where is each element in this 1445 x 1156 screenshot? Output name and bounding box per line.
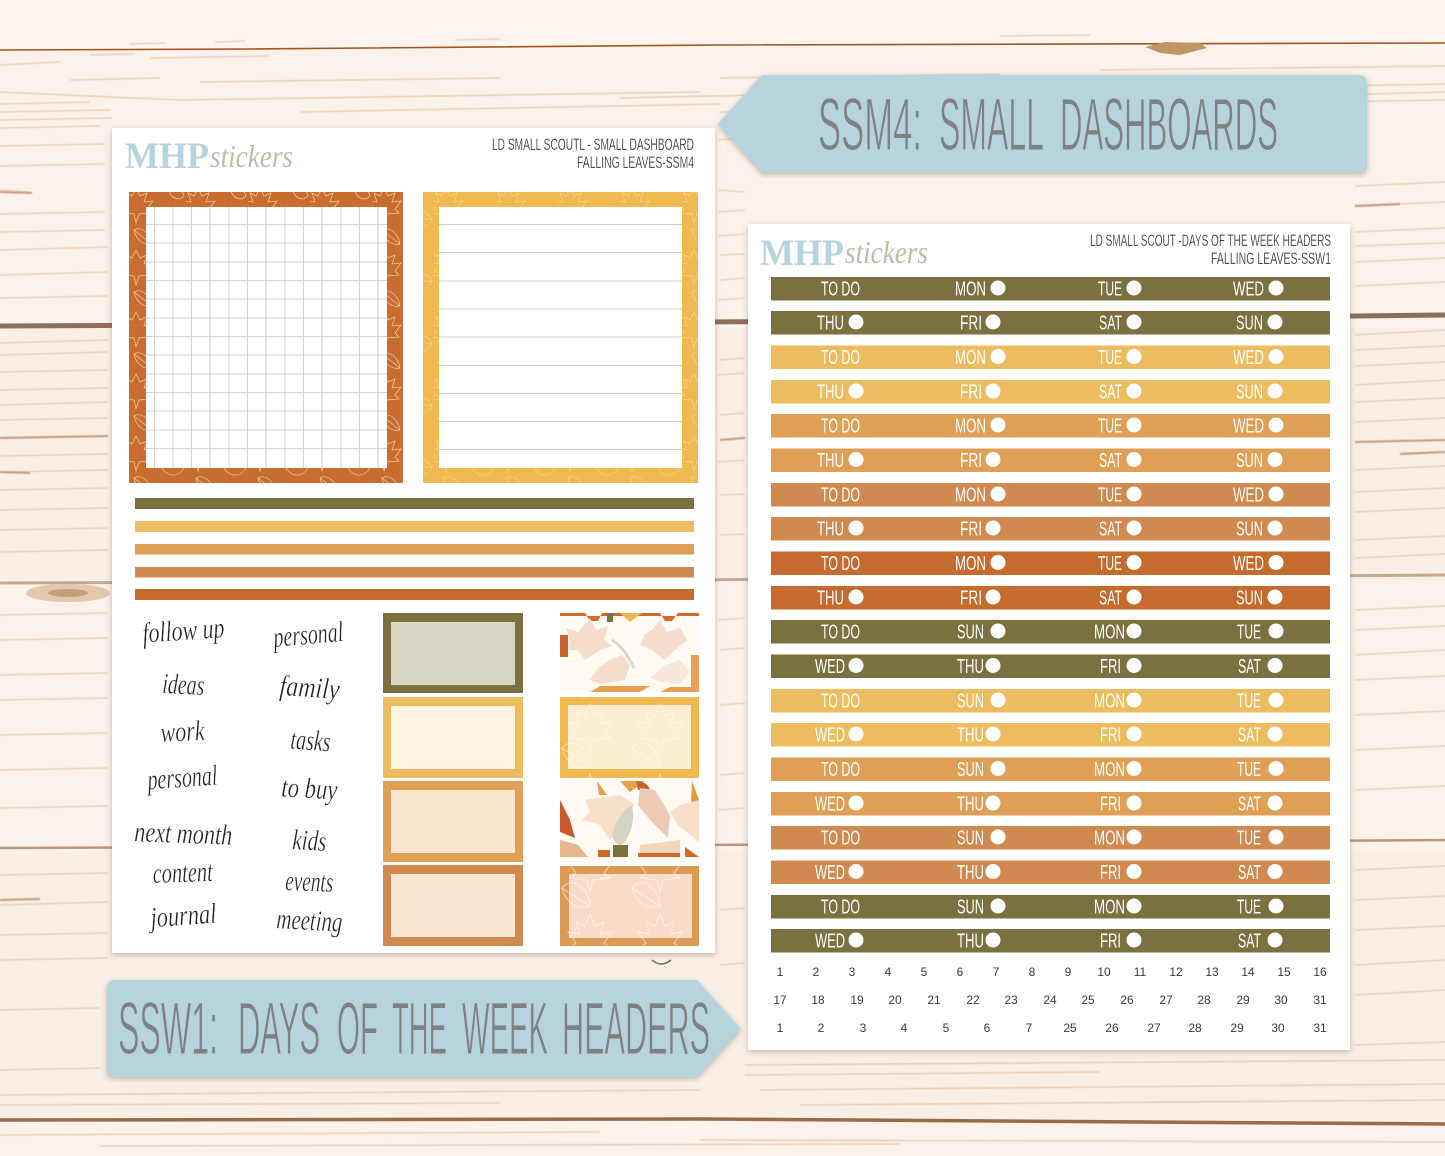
header strip row 12: FRI: [1100, 656, 1121, 678]
logo: MHP stickers: MHP: [125, 136, 209, 177]
header strip row 9: MON: [955, 553, 986, 575]
patterned leaf sticker: peach frame: [560, 866, 699, 946]
banner: SSM4 small dashboards: SSM4:: [818, 83, 922, 166]
patterned leaf sticker: peach collage: [560, 613, 699, 692]
banner: SSW1 days of the week headers: HEADERS: [562, 987, 710, 1070]
date numbers row 3: 31: [1313, 1021, 1327, 1035]
date numbers row 2: 24: [1043, 993, 1057, 1007]
date numbers row 1: 9: [1065, 965, 1072, 979]
date numbers row 1: 12: [1169, 965, 1183, 979]
header strip row 19: SUN: [957, 896, 984, 918]
header strip row 11: TUE: [1237, 622, 1261, 644]
header strip row 12: WED: [815, 656, 845, 678]
date numbers row 1: 16: [1313, 965, 1327, 979]
banner: SSM4 small dashboards: [718, 75, 1367, 173]
colour stripes: [135, 498, 694, 600]
banner: SSW1 days of the week headers: OF: [337, 987, 378, 1070]
header strip row 20: [771, 929, 1330, 952]
header strip row 6: FRI: [960, 450, 982, 472]
date numbers row 2: 18: [811, 993, 825, 1007]
header strip row 14: SAT: [1238, 724, 1261, 746]
header strip row 9: TUE: [1098, 553, 1122, 575]
header strip row 8: FRI: [960, 518, 982, 540]
handwritten word stickers: next month: [134, 816, 233, 852]
header strip row 16: [771, 792, 1330, 816]
header strip row 13: TUE: [1237, 690, 1261, 712]
header strip row 3: TUE: [1098, 347, 1122, 369]
date numbers row 2: 21: [927, 993, 941, 1007]
date numbers row 2: 27: [1159, 993, 1173, 1007]
date numbers row 2: 19: [850, 993, 864, 1007]
header strip row 19: TUE: [1237, 896, 1261, 918]
header strip row 11: [771, 620, 1330, 644]
date numbers row 1: 8: [1029, 965, 1036, 979]
header strip row 2: FRI: [960, 312, 982, 334]
header strip row 9: TO DO: [821, 553, 860, 575]
header strip row 17: [771, 826, 1330, 850]
date numbers row 2: 30: [1274, 993, 1288, 1007]
header strip row 1: MON: [955, 278, 986, 300]
handwritten word stickers: follow up: [141, 612, 225, 650]
header strip row 15: SUN: [957, 759, 984, 781]
date numbers row 1: 3: [849, 965, 856, 979]
date numbers row 3: [777, 1021, 1327, 1035]
date numbers row 2: 23: [1004, 993, 1018, 1007]
date numbers row 3: 26: [1105, 1021, 1119, 1035]
header strip row 10: SUN: [1236, 588, 1263, 610]
date numbers row 1: 6: [957, 965, 964, 979]
header strip row 10: SAT: [1099, 588, 1122, 610]
panel: yellow lined sticker: [423, 192, 698, 483]
handwritten word stickers: journal: [146, 898, 217, 935]
header strip row 7: [771, 483, 1330, 506]
date numbers row 3: 1: [777, 1021, 784, 1035]
header strip row 5: MON: [955, 416, 986, 438]
header strip row 4: FRI: [960, 382, 982, 404]
header strip row 3: TO DO: [821, 347, 860, 369]
header strip row 3: MON: [955, 347, 986, 369]
header strip row 2: SUN: [1236, 312, 1263, 334]
header strip row 7: TO DO: [821, 484, 860, 506]
logo: MHP stickers: stickers: [210, 138, 293, 174]
header strip row 5: TUE: [1098, 416, 1122, 438]
handwritten word stickers: events: [285, 865, 334, 899]
date numbers row 2: 26: [1120, 993, 1134, 1007]
header strip row 17: TUE: [1237, 828, 1261, 850]
header strip row 3: WED: [1233, 347, 1264, 369]
header strip row 20: FRI: [1100, 930, 1121, 952]
logo: MHP stickers: MHP: [760, 233, 844, 274]
date numbers row 2: 25: [1081, 993, 1095, 1007]
header strip row 20: WED: [815, 930, 845, 952]
header strip row 1: WED: [1233, 278, 1264, 300]
header strip row 7: TUE: [1098, 484, 1122, 506]
header strip row 15: [771, 758, 1330, 781]
header strip row 11: TO DO: [821, 622, 860, 644]
date numbers row 1: 5: [921, 965, 928, 979]
date numbers row 1: 7: [993, 965, 1000, 979]
header strip row 6: SAT: [1099, 450, 1122, 472]
header strip row 6: SUN: [1236, 450, 1263, 472]
date numbers row 3: 7: [1026, 1021, 1033, 1035]
header strip row 15: MON: [1094, 759, 1125, 781]
date numbers row 3: 28: [1188, 1021, 1202, 1035]
header strip row 10: THU: [817, 588, 844, 610]
date numbers row 1: 15: [1277, 965, 1291, 979]
header strip row 17: SUN: [957, 828, 984, 850]
date numbers row 1: 1: [777, 965, 784, 979]
header strip row 5: TO DO: [821, 416, 860, 438]
date numbers row 3: 27: [1147, 1021, 1161, 1035]
header strip row 12: [771, 654, 1330, 678]
logo: MHP stickers: stickers: [845, 234, 928, 270]
date numbers row 2: 31: [1313, 993, 1327, 1007]
header strip row 19: [771, 895, 1330, 918]
header strip row 16: THU: [957, 794, 984, 816]
banner: SSW1 days of the week headers: SSW1:: [118, 987, 218, 1070]
header strip row 1: TUE: [1098, 278, 1122, 300]
header strip row 4: SAT: [1099, 382, 1122, 404]
header strip row 13: TO DO: [821, 690, 860, 712]
header strip row 18: [771, 860, 1330, 884]
header strip row 14: [771, 723, 1330, 746]
header strip row 16: WED: [815, 794, 845, 816]
banner: SSW1 days of the week headers: [107, 980, 741, 1077]
header strip row 8: SUN: [1236, 518, 1263, 540]
handwritten word stickers: ideas: [162, 668, 205, 702]
patterned leaf sticker: orange collage: [560, 781, 699, 862]
header strip row 12: SAT: [1238, 656, 1261, 678]
date numbers row 2: 29: [1236, 993, 1250, 1007]
date numbers row 2: 20: [888, 993, 902, 1007]
date numbers row 3: 3: [860, 1021, 867, 1035]
handwritten word stickers: to buy: [281, 772, 338, 806]
patterned leaf sticker: yellow frame: [560, 697, 699, 778]
date numbers row 1: 4: [885, 965, 892, 979]
sheet title: FALLING LEAVES-SSW1: [1211, 249, 1331, 268]
header strip row 17: TO DO: [821, 828, 860, 850]
date numbers row 1: 13: [1205, 965, 1219, 979]
date numbers row 2: 28: [1197, 993, 1211, 1007]
header strip row 18: WED: [815, 862, 845, 884]
date numbers row 1: 2: [813, 965, 820, 979]
date numbers row 1: 11: [1134, 965, 1147, 979]
header strip row 9: [771, 552, 1330, 575]
date numbers row 2: [773, 993, 1327, 1007]
panel: orange grid sticker: [129, 192, 403, 483]
date numbers row 1: 10: [1097, 965, 1111, 979]
header strip row 1: TO DO: [821, 278, 860, 300]
date numbers row 2: 22: [966, 993, 980, 1007]
header strip row 11: SUN: [957, 622, 984, 644]
banner: SSM4 small dashboards: SMALL: [939, 83, 1044, 166]
date numbers row 3: 4: [901, 1021, 908, 1035]
header strip row 14: WED: [815, 724, 845, 746]
banner: SSW1 days of the week headers: THE: [392, 987, 447, 1070]
header strip row 13: [771, 689, 1330, 712]
sheet title: FALLING LEAVES-SSM4: [577, 153, 694, 172]
panel: small dashboard sticker sheet: [112, 128, 715, 953]
date numbers row 3: 2: [818, 1021, 825, 1035]
date numbers row 3: 5: [943, 1021, 950, 1035]
header strip row 5: [771, 414, 1330, 438]
date numbers row 2: 17: [773, 993, 787, 1007]
header strip row 16: SAT: [1238, 794, 1261, 816]
header strip row 1: [771, 277, 1330, 300]
header strip row 8: [771, 517, 1330, 540]
date numbers row 1: [777, 965, 1327, 979]
header strip row 15: TO DO: [821, 759, 860, 781]
header strip row 20: THU: [957, 930, 984, 952]
handwritten word stickers: personal: [145, 760, 218, 797]
logo: MHP stickers: [125, 136, 293, 177]
header strip row 15: TUE: [1237, 759, 1261, 781]
header strip row 2: [771, 311, 1330, 334]
banner: SSW1 days of the week headers: WEEK: [462, 987, 548, 1070]
handwritten word stickers: family: [279, 670, 341, 706]
header strip row 6: [771, 448, 1330, 472]
date numbers row 3: 29: [1230, 1021, 1244, 1035]
header strip row 14: FRI: [1100, 724, 1121, 746]
header strip row 2: SAT: [1099, 312, 1122, 334]
handwritten word stickers: work: [160, 715, 206, 749]
handwritten word stickers: meeting: [276, 903, 343, 939]
framed solid label stickers: [383, 613, 523, 946]
date numbers row 1: 14: [1241, 965, 1255, 979]
handwritten word stickers: content: [152, 856, 214, 890]
header strip row 11: MON: [1094, 622, 1125, 644]
header strip row 4: [771, 380, 1330, 404]
handwritten word stickers: personal: [271, 616, 344, 654]
header strip row 20: SAT: [1238, 930, 1261, 952]
header strip row 9: WED: [1233, 553, 1264, 575]
header strip row 4: SUN: [1236, 382, 1263, 404]
header strip row 16: FRI: [1100, 794, 1121, 816]
header strip row 18: THU: [957, 862, 984, 884]
header strip row 19: MON: [1094, 896, 1125, 918]
header strip row 4: THU: [817, 382, 844, 404]
date numbers row 3: 6: [984, 1021, 991, 1035]
header strip row 17: MON: [1094, 828, 1125, 850]
header strip row 13: SUN: [957, 690, 984, 712]
header strip row 18: SAT: [1238, 862, 1261, 884]
panel: days of the week sticker sheet: [748, 224, 1350, 1050]
handwritten word stickers: [134, 612, 344, 939]
header strip row 7: MON: [955, 484, 986, 506]
header strip row 14: THU: [957, 724, 984, 746]
header strip row 12: THU: [957, 656, 984, 678]
header strip row 18: FRI: [1100, 862, 1121, 884]
header strip row 10: FRI: [960, 588, 982, 610]
logo: MHP stickers: [760, 233, 928, 274]
header strip row 10: [771, 586, 1330, 610]
header strip row 8: SAT: [1099, 518, 1122, 540]
header strip row 13: MON: [1094, 690, 1125, 712]
header strip row 5: WED: [1233, 416, 1264, 438]
date numbers row 3: 30: [1271, 1021, 1285, 1035]
date numbers row 3: 25: [1063, 1021, 1077, 1035]
sheet title: LD SMALL SCOUTL - SMALL DASHBOARD: [492, 135, 694, 154]
header strip row 3: [771, 346, 1330, 369]
header strip row 2: THU: [817, 312, 844, 334]
handwritten word stickers: tasks: [290, 724, 332, 758]
sheet title: [1090, 231, 1331, 268]
header strip row 7: WED: [1233, 484, 1264, 506]
banner: SSW1 days of the week headers: DAYS: [238, 987, 320, 1070]
header strip row 8: THU: [817, 518, 844, 540]
handwritten word stickers: kids: [292, 824, 327, 858]
header strip row 6: THU: [817, 450, 844, 472]
header strip row 19: TO DO: [821, 896, 860, 918]
sheet title: [492, 135, 694, 172]
